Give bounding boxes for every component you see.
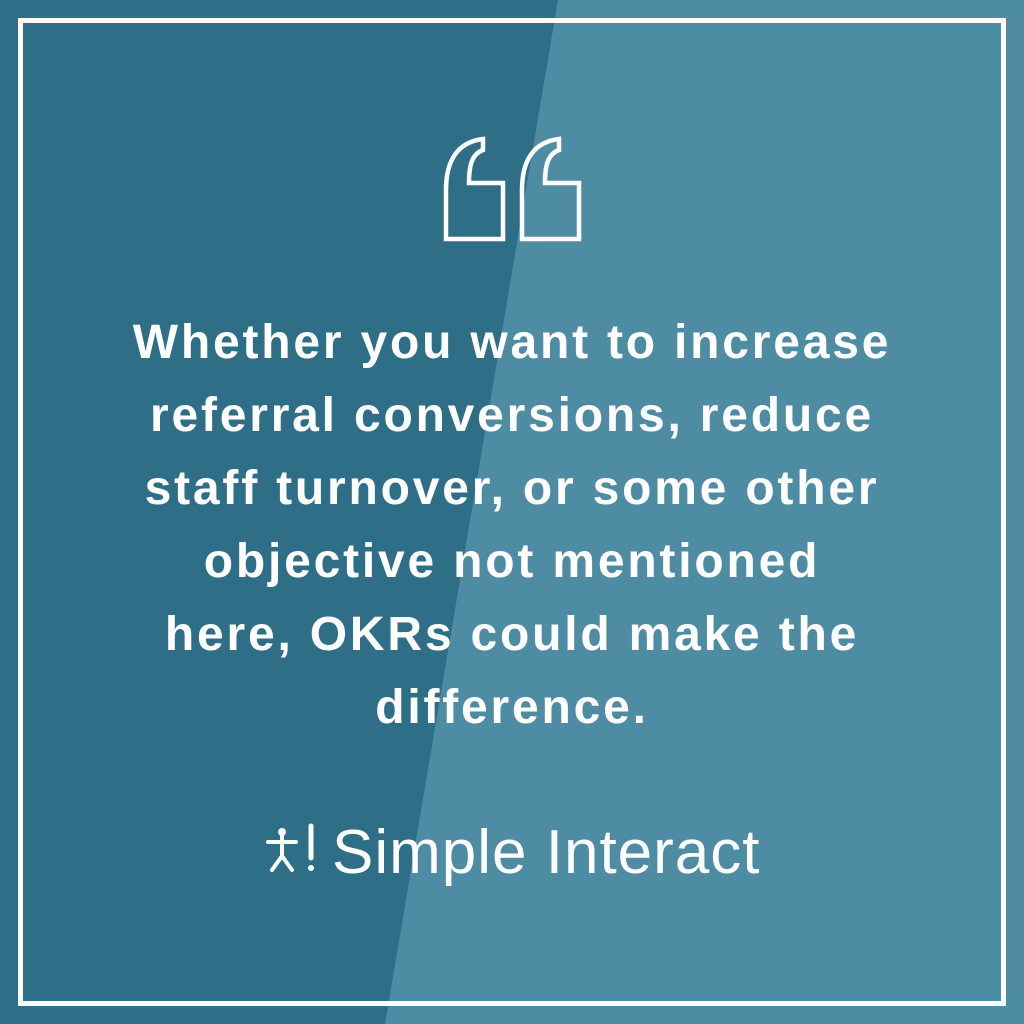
quote text: Whether you want to increase — [133, 316, 891, 369]
quote text: referral conversions, reduce — [150, 389, 874, 442]
logo text: Simple Interact — [332, 818, 761, 887]
quote text: here, OKRs could make the — [165, 608, 859, 661]
logo — [266, 818, 761, 887]
quote text: difference. — [375, 681, 649, 734]
quote text — [132, 316, 891, 734]
quote text: objective not mentioned — [204, 535, 820, 588]
icon: stick figure — [266, 824, 314, 872]
quote text: staff turnover, or some other — [145, 462, 879, 515]
icon: quote marks — [444, 136, 582, 242]
